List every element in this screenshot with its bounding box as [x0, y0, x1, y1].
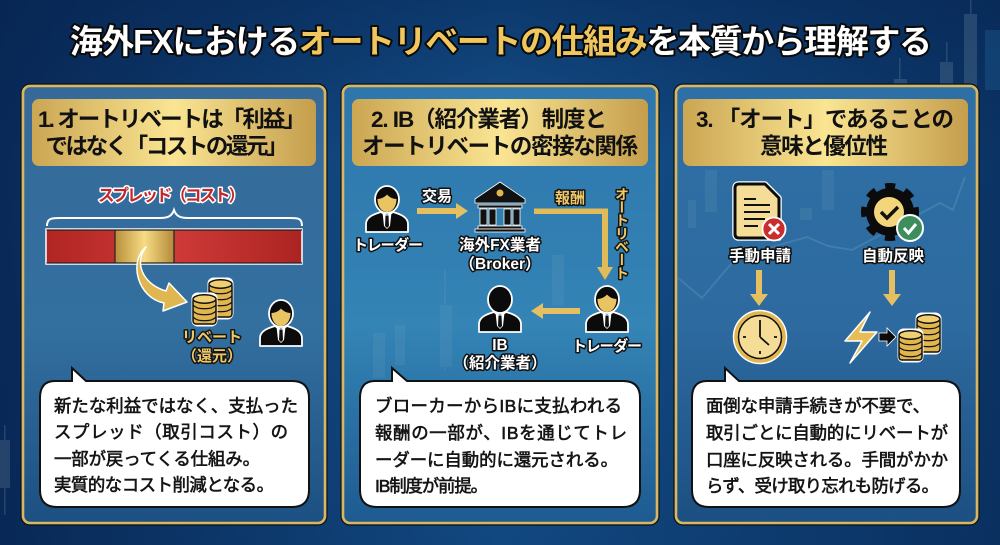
callout: スプレッド（取引コスト）の — [54, 422, 288, 442]
rebate label: （還元） — [182, 348, 242, 365]
icon: IB — [479, 286, 521, 332]
callout: IB制度が前提。 — [375, 476, 488, 496]
heading pill — [32, 99, 316, 166]
panel: IB system — [341, 84, 659, 525]
callout: 実質的なコスト削減となる。 — [54, 475, 274, 495]
manual label: 手動申請 — [729, 246, 791, 265]
curved arrow — [137, 247, 187, 311]
icon: coins — [898, 312, 942, 362]
icon: trader — [366, 186, 408, 232]
arrow down — [883, 270, 901, 306]
callout — [692, 368, 960, 507]
heading pill: 意味と優位性 — [760, 134, 888, 159]
callout — [40, 368, 309, 507]
heading pill — [683, 99, 968, 166]
rebate label — [182, 329, 242, 365]
icon: trader — [260, 300, 302, 346]
callout: らず、受け取り忘れも防げる。 — [706, 476, 939, 496]
heading pill — [352, 99, 648, 166]
callout: ーダーに自動的に還元される。 — [375, 450, 618, 470]
brace — [47, 210, 302, 226]
trader label: トレーダー — [353, 236, 423, 254]
title: 海外FXにおけるオートリベートの仕組みを本質から理解する — [70, 23, 932, 60]
icon: bank — [475, 182, 525, 232]
trade label: 交易 — [422, 188, 452, 205]
icon: clock — [734, 310, 786, 364]
callout: 報酬の一部が、IBを通じてトレ — [375, 423, 627, 443]
heading pill: オートリベートの密接な関係 — [362, 134, 638, 159]
arrow: reward — [534, 208, 613, 280]
icon: document — [735, 184, 786, 240]
heading pill: 1. オートリベートは「利益」 — [38, 107, 306, 132]
reward label: 報酬 — [555, 190, 585, 207]
arrow down — [750, 270, 768, 306]
IB label: IB — [492, 337, 508, 354]
icon: small arrow — [879, 328, 896, 346]
icon: trader — [586, 286, 628, 332]
heading pill: ではなく「コストの還元」 — [46, 134, 288, 159]
IB label: （紹介業者） — [453, 354, 547, 372]
spread label: スプレッド（コスト） — [98, 186, 245, 205]
vertical label: オートリベート — [614, 187, 630, 280]
callout: 面倒な申請手続きが不要で、 — [706, 396, 930, 416]
IB label — [453, 337, 547, 372]
trader label: トレーダー — [572, 337, 642, 355]
arrow: trade — [417, 203, 468, 219]
broker label: 海外FX業者 — [459, 235, 541, 254]
broker label — [459, 235, 541, 273]
arrow: to IB — [531, 303, 580, 319]
chart line — [678, 177, 965, 298]
callout — [360, 368, 640, 507]
heading pill: 2. IB（紹介業者）制度と — [371, 107, 607, 132]
callout: 取引ごとに自動的にリベートが — [706, 423, 948, 443]
callout: 一部が戻ってくる仕組み。 — [54, 449, 260, 469]
callout: ブローカーからIBに支払われる — [375, 396, 622, 416]
panel: meaning of auto — [674, 84, 979, 525]
callout: 口座に反映される。手間がかか — [706, 450, 948, 470]
rebate label: リベート — [182, 329, 242, 346]
panel: rebate is cost return — [21, 84, 327, 525]
spread bar — [46, 229, 302, 264]
callout: 新たな利益ではなく、支払った — [54, 396, 298, 416]
icon: coins — [192, 278, 234, 326]
broker label: （Broker） — [460, 256, 540, 273]
icon: lightning — [845, 312, 877, 363]
auto label: 自動反映 — [862, 247, 924, 265]
heading pill: 3. 「オート」であることの — [696, 107, 954, 132]
icon: gear — [864, 186, 923, 241]
